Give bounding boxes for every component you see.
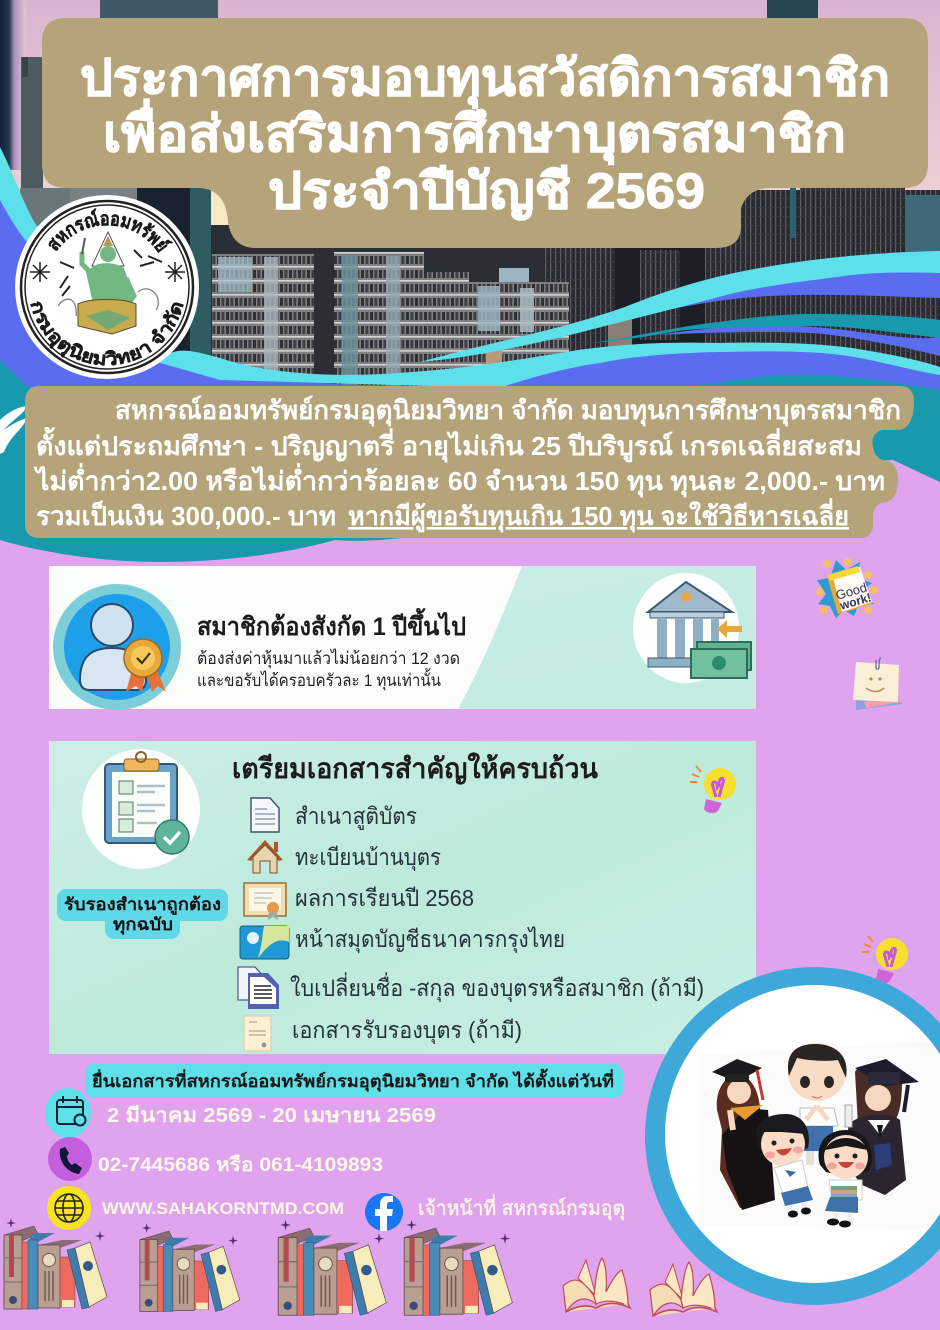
sticker text: Good <box>834 580 869 603</box>
open book 1 <box>563 1258 630 1312</box>
certified copy badge <box>57 889 228 939</box>
date row <box>45 1088 436 1138</box>
facebook row <box>365 1193 625 1231</box>
facebook text: เจ้าหน้าที่ สหกรณ์กรมอุตุ <box>418 1194 625 1221</box>
panel: membership requirement <box>49 566 756 710</box>
icon: clipboard <box>82 749 200 869</box>
membership detail line 1: ต้องส่งค่าหุ้นมาแล้วไม่น้อยกว่า 12 งวด <box>197 648 460 669</box>
icon: certified letter <box>244 1016 271 1051</box>
girl with bow <box>756 1114 813 1218</box>
submission text: ยื่นเอกสารที่สหกรณ์ออมทรัพย์กรมอุตุนิยมวิทยา จำกัด ได้ตั้งแต่วันที่ <box>92 1068 614 1092</box>
teal wave behind intro text <box>0 360 940 562</box>
icon: bank and cash <box>633 573 751 683</box>
icon: calendar <box>57 1096 86 1126</box>
open book 2 <box>650 1262 717 1316</box>
white swoosh <box>0 406 27 454</box>
phone row <box>48 1137 383 1181</box>
document item 2: ทะเบียนบ้านบุตร <box>295 844 441 871</box>
phone text: 02-7445686 หรือ 061-4109893 <box>98 1154 383 1176</box>
logo: cooperative seal <box>15 195 199 379</box>
documents heading: เตรียมเอกสารสำคัญให้ครบถ้วน <box>232 752 598 785</box>
document item 5: ใบเปลี่ยนชื่อ -สกุล ของบุตรหรือสมาชิก (ถ้ามี) <box>290 972 704 1002</box>
icon: phone <box>60 1147 82 1174</box>
boy <box>788 1043 847 1165</box>
title panel <box>42 18 928 248</box>
sticker: smiley note <box>853 658 902 710</box>
membership detail line 2: และขอรับได้ครอบครัวละ 1 ทุนเท่านั้น <box>197 668 441 691</box>
icon: stacked documents <box>238 967 279 1009</box>
icon: bank passbook <box>240 926 289 959</box>
badge line 1: รับรองสำเนาถูกต้อง <box>64 895 221 916</box>
icon: document <box>251 798 279 832</box>
title line 2: เพื่อส่งเสริมการศึกษาบุตรสมาชิก <box>103 99 846 165</box>
document item 1: สำเนาสูติบัตร <box>295 803 417 830</box>
sticker: lightbulb large <box>862 936 908 983</box>
intro line 1: สหกรณ์ออมทรัพย์กรมอุตุนิยมวิทยา จำกัด มอบทุนการศึกษาบุตรสมาชิก <box>115 395 901 427</box>
intro line 4 underlined: หากมีผู้ขอรับทุนเกิน 150 ทุน จะใช้วิธีหารเฉลี่ย <box>348 497 849 533</box>
logo deity <box>30 232 185 334</box>
date text: 2 มีนาคม 2569 - 20 เมษายน 2569 <box>107 1104 436 1127</box>
website text: WWW.SAHAKORNTMD.COM <box>102 1199 344 1218</box>
icon: member badge <box>53 584 181 710</box>
intro text panel <box>25 386 914 538</box>
title line 3: ประจำปีบัญชี 2569 <box>268 163 705 220</box>
icon: certificate <box>244 883 286 920</box>
icon: house <box>247 840 283 873</box>
panel: required documents <box>49 741 756 1054</box>
document item 4: หน้าสมุดบัญชีธนาคารกรุงไทย <box>295 926 565 953</box>
icon: facebook f <box>375 1196 393 1231</box>
intro line 3: ไม่ต่ำกว่า2.00 หรือไม่ต่ำกว่าร้อยละ 60 จำนวน 150 ทุน ทุนละ 2,000.- บาท <box>33 462 885 498</box>
logo text bottom: กรมอุตุนิยมวิทยา จำกัด <box>30 301 184 366</box>
submission callout <box>85 1064 623 1098</box>
logo text top: สหกรณ์ออมทรัพย์ <box>48 208 174 253</box>
girl with books <box>818 1130 872 1228</box>
intro line 4: รวมเป็นเงิน 300,000.- บาท <box>36 500 336 531</box>
left graduate <box>712 1059 775 1210</box>
books group 3 <box>278 1220 386 1315</box>
sticker: lightbulb small <box>690 766 736 813</box>
books group 4 <box>404 1220 512 1315</box>
city skyline photo <box>0 0 940 400</box>
sticker text 2: work! <box>837 590 873 613</box>
membership heading: สมาชิกต้องสังกัด 1 ปีขึ้นไป <box>197 607 466 641</box>
document item 3: ผลการเรียนปี 2568 <box>295 885 474 911</box>
document item 6: เอกสารรับรองบุตร (ถ้ามี) <box>292 1017 522 1044</box>
icon: globe <box>55 1194 83 1222</box>
title line 1: ประกาศการมอบทุนสวัสดิการสมาชิก <box>80 50 890 109</box>
decorative waves <box>0 147 940 400</box>
badge line 2: ทุกฉบับ <box>113 915 173 935</box>
website row <box>47 1186 344 1230</box>
books group 1 <box>4 1218 107 1309</box>
intro line 2: ตั้งแต่ประถมศึกษา - ปริญญาตรี่ อายุไม่เกิน 25 ปีบริบูรณ์ เกรดเฉลี่ยสะสม <box>36 426 862 463</box>
circle: students illustration <box>645 967 940 1305</box>
books group 2 <box>140 1223 240 1311</box>
sticker: good work <box>816 558 878 618</box>
right graduate <box>845 1059 919 1195</box>
